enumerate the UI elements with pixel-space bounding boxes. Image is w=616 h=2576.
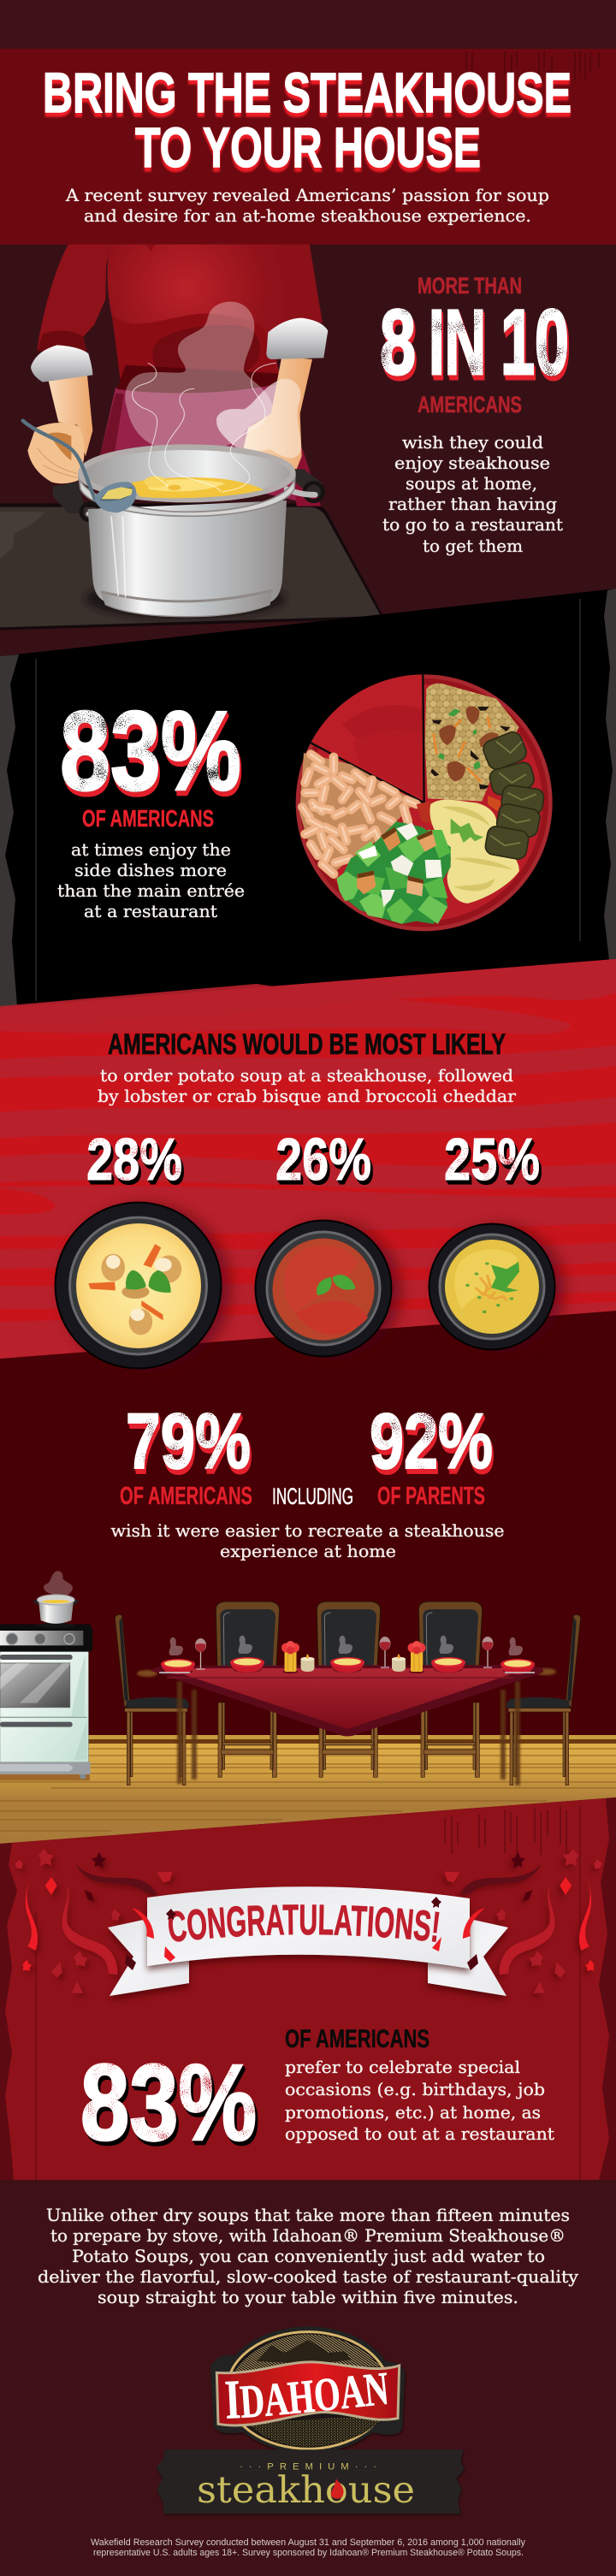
intro text — [65, 185, 549, 226]
rice and meat — [425, 684, 519, 802]
right arm and hand — [242, 357, 312, 469]
text: product description: Potato Soups, you can conveniently just add water to — [72, 2246, 545, 2266]
stat: more than 8 in 10 Americans: AMERICANS — [418, 392, 522, 417]
pot handles — [53, 469, 323, 520]
small pot on stove — [33, 1571, 80, 1628]
red ribbon — [216, 2362, 400, 2425]
oven with pot — [0, 1571, 92, 1780]
bowl: broccoli cheddar — [429, 1223, 554, 1350]
survey disclaimer: Wakefield Research Survey conducted between August 31 and September 6, 2016 among 1,000 nationally — [91, 2538, 525, 2548]
stat: more than 8 in 10 Americans: 8 — [380, 290, 416, 394]
logo: Idahoan — [210, 2326, 406, 2450]
title: TO YOUR HOUSE — [135, 115, 481, 179]
woman's skirt — [100, 382, 321, 506]
text: potato soup — [98, 1065, 516, 1106]
label: of Americans: OF AMERICANS — [120, 1483, 252, 1510]
text: wish it were easier — [111, 1520, 505, 1561]
title — [43, 61, 572, 179]
text: potato soup: to order potato soup at a steakhouse, followed — [100, 1065, 513, 1086]
stuffed grape leaves — [481, 730, 545, 861]
bowl: potato soup — [55, 1203, 221, 1369]
big number 92%: 92% — [370, 1398, 493, 1485]
steam clouds — [125, 302, 273, 450]
confetti on banner — [125, 1897, 485, 1970]
text: side dishes: at a restaurant — [84, 901, 217, 921]
stat: more than 8 in 10 Americans: 10 — [500, 290, 569, 394]
soup in pot — [130, 477, 264, 498]
stat: more than 8 in 10 Americans — [380, 273, 569, 417]
flame mark — [331, 2478, 344, 2499]
stat: more than 8 in 10 Americans: MORE THAN — [418, 273, 522, 299]
confetti left — [15, 1849, 173, 1993]
text: side dishes: than the main entrée — [57, 880, 245, 901]
ladle — [23, 421, 136, 512]
banner left tail — [108, 1919, 189, 1996]
panel: Americans would be most likely — [0, 959, 616, 1369]
left arm and hand — [47, 372, 92, 456]
stat: 25%: 25% — [444, 1126, 540, 1193]
wood floor — [0, 1735, 616, 1844]
pot rim and interior — [79, 475, 295, 516]
text: wish they could: to go to a restaurant — [382, 514, 563, 535]
big number 79%: 79% — [126, 1398, 251, 1485]
dining chairs — [115, 1602, 581, 1785]
salad — [336, 821, 451, 924]
banner center — [147, 1886, 470, 1969]
text: product description — [38, 2205, 579, 2307]
text: wish they could: to get them — [423, 536, 523, 556]
text: side dishes — [57, 839, 245, 921]
text: wish they could — [382, 432, 563, 556]
logo: Premium Steakhouse label: ···PREMIUM··· — [240, 2462, 376, 2472]
text: product description: Unlike other dry soups that take more than fifteen minutes — [46, 2205, 570, 2225]
intro text: and desire for an at-home steakhouse experience. — [84, 205, 531, 226]
stat: 26%: 26% — [275, 1126, 371, 1193]
illustration: plate with side dishes — [296, 674, 553, 931]
ribbon banner — [108, 1886, 508, 2002]
survey disclaimer — [91, 2538, 525, 2558]
stat: more than 8 in 10 Americans: IN — [429, 290, 486, 394]
panel: 8 in 10 Americans — [0, 245, 616, 672]
text: product description: to prepare by stove, with Idahoan® Premium Steakhouse® — [50, 2225, 566, 2246]
counter top — [0, 503, 385, 631]
text: special occasions: opposed to out at a restaurant — [285, 2123, 554, 2144]
rising steam lines — [133, 363, 276, 492]
left cuff — [31, 345, 92, 382]
banner right tail — [428, 1919, 508, 1996]
panel: 79% and 92% with dining room — [0, 1283, 616, 1848]
bowl: lobster bisque — [255, 1220, 392, 1357]
confetti right — [444, 1849, 602, 1993]
ribbon banner: CONGRATULATIONS! — [168, 1904, 440, 1942]
empty wedge — [311, 674, 424, 802]
text: special occasions: prefer to celebrate special — [285, 2057, 520, 2077]
label: of Americans: OF AMERICANS — [82, 805, 214, 832]
panel: footer — [38, 2205, 579, 2558]
label: of parents: OF PARENTS — [377, 1483, 485, 1510]
label: including: INCLUDING — [272, 1483, 353, 1509]
panel: congratulations — [0, 1797, 616, 2180]
stat: 28%: 28% — [86, 1126, 182, 1193]
table settings — [159, 1636, 535, 1674]
text: side dishes: side dishes more — [74, 860, 227, 880]
text: wish it were easier: wish it were easier to recreate a steakhouse — [111, 1520, 505, 1541]
text: wish they could: rather than having — [388, 494, 557, 514]
text: wish they could: wish they could — [402, 432, 543, 453]
logo: Idahoan: IDAHOAN — [225, 2372, 387, 2419]
text: special occasions: occasions (e.g. birthdays, job — [285, 2079, 545, 2099]
white beans — [299, 753, 417, 875]
big number 83%: 83% — [60, 688, 241, 814]
brand wordmark — [226, 2403, 391, 2419]
text: product description: deliver the flavorful, slow-cooked taste of restaurant-quality — [38, 2266, 579, 2287]
right cuff — [266, 318, 328, 359]
text: wish it were easier: experience at home — [220, 1541, 396, 1561]
logo: Premium Steakhouse label — [157, 2449, 465, 2514]
text: side dishes: at times enjoy the — [71, 839, 231, 860]
dining table — [137, 1665, 556, 1785]
woman's shirt — [37, 245, 323, 394]
text: wish they could: soups at home, — [406, 473, 537, 494]
logo: Premium Steakhouse label: steakhouse — [197, 2469, 415, 2512]
illustration: woman cooking at pot — [0, 245, 385, 631]
survey disclaimer: representative U.S. adults ages 18+. Survey sponsored by Idahoan® Premium Steakhouse® Potato Soups. — [93, 2548, 524, 2558]
label: of Americans: OF AMERICANS — [285, 2025, 429, 2053]
text: special occasions: promotions, etc.) at home, as — [285, 2102, 541, 2123]
big number 83%: 83% — [80, 2042, 257, 2163]
panel: 83% side dishes — [0, 589, 616, 1008]
text: potato soup: by lobster or crab bisque and broccoli cheddar — [98, 1086, 516, 1106]
intro text: A recent survey revealed Americans’ passion for soup — [65, 185, 549, 205]
panel: title header — [0, 49, 616, 245]
text: product description: soup straight to your table within five minutes. — [98, 2287, 518, 2307]
grilled peppers — [417, 802, 432, 824]
mashed potatoes — [429, 800, 519, 903]
pot shadow — [86, 579, 285, 619]
text: special occasions — [285, 2057, 554, 2144]
pot body — [88, 500, 287, 613]
text: wish they could: enjoy steakhouse — [394, 453, 550, 473]
banner heading — [169, 1934, 439, 1942]
